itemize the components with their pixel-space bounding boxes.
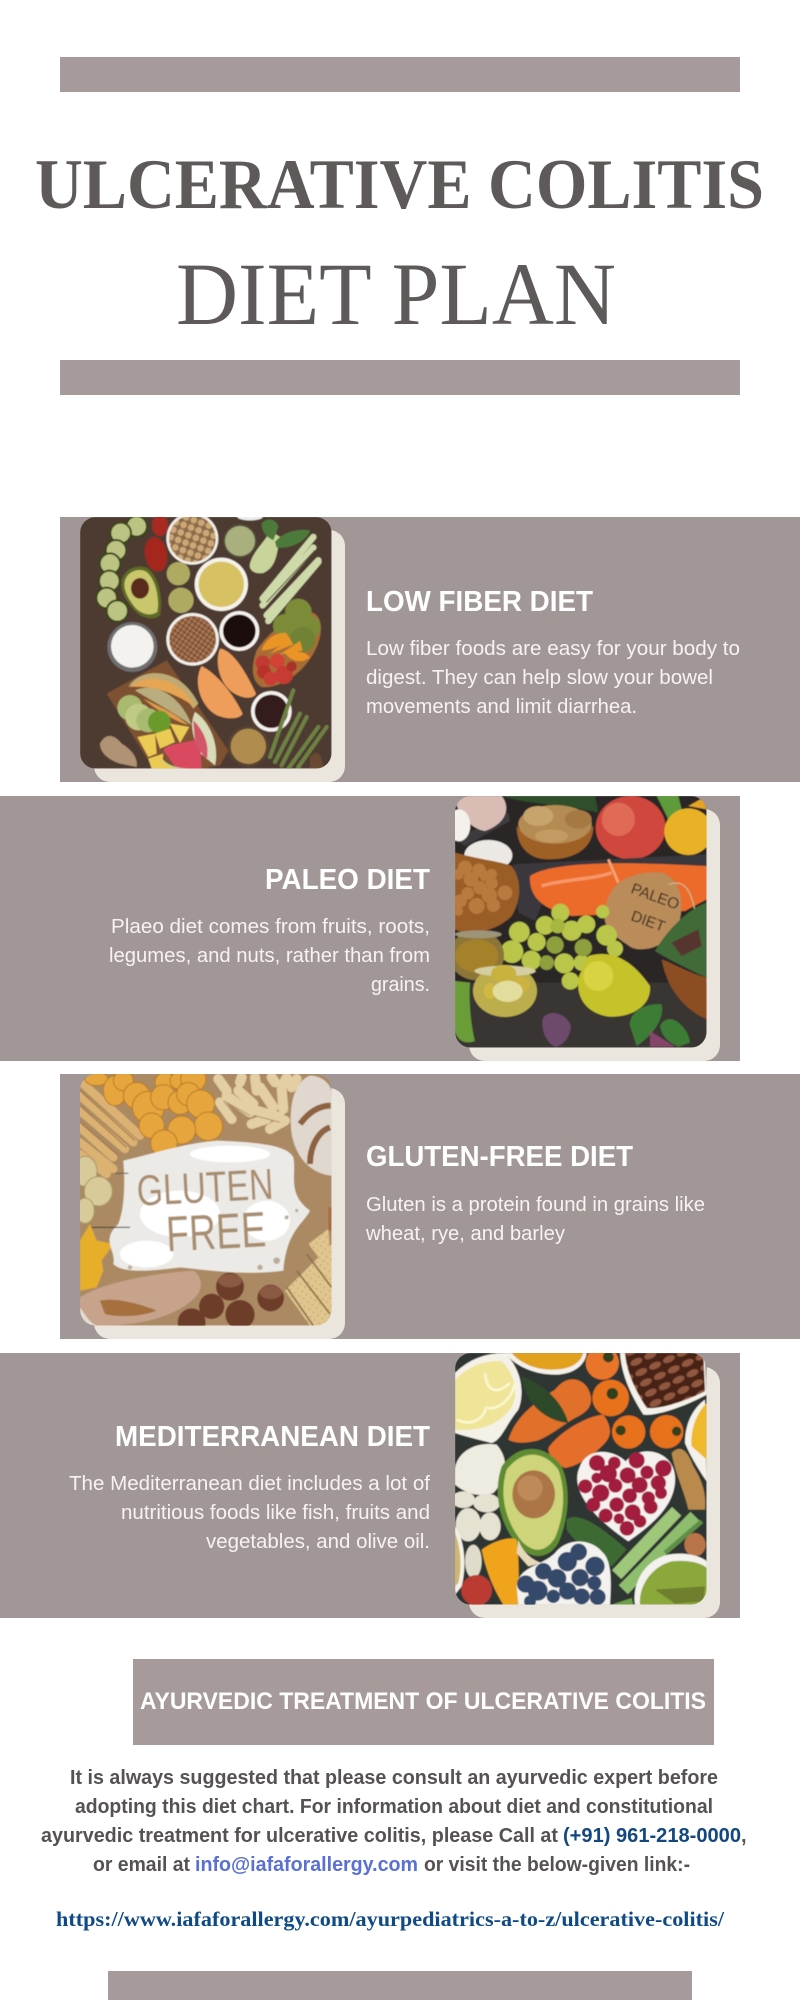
description: digest. They can help slow your bowel xyxy=(366,667,713,689)
description: wheat, rye, and barley xyxy=(365,1223,565,1245)
band xyxy=(60,517,800,782)
description: movements and limit diarrhea. xyxy=(366,696,637,718)
description: Low fiber foods are easy for your body to xyxy=(366,638,740,660)
contact paragraph: adopting this diet chart. For information about diet and constitutional xyxy=(75,1796,713,1818)
description xyxy=(366,638,740,718)
photo: paleo foods: DIET xyxy=(629,908,668,936)
heading: GLUTEN-FREE DIET xyxy=(366,1141,633,1173)
photo backing card xyxy=(469,1367,720,1618)
title line: ulcerative colitis: ULCERATIVE COLITIS xyxy=(35,146,764,224)
heading: MEDITERRANEAN DIET xyxy=(115,1421,430,1453)
lower title bar xyxy=(60,360,740,395)
description: The Mediterranean diet includes a lot of xyxy=(69,1473,430,1495)
top bar xyxy=(60,57,740,92)
band xyxy=(0,1353,740,1618)
contact paragraph: , xyxy=(741,1825,747,1847)
photo: paleo foods xyxy=(448,796,712,1048)
photo: gluten free foods: FREE xyxy=(165,1201,267,1262)
description: Gluten is a protein found in grains like xyxy=(366,1194,705,1216)
banner heading: AYURVEDIC TREATMENT OF ULCERATIVE COLITIS xyxy=(140,1688,706,1715)
title line: diet plan: DIET PLAN xyxy=(176,246,616,344)
description: nutritious foods like fish, fruits and xyxy=(121,1502,430,1524)
photo: paleo foods: PALEO xyxy=(629,880,681,914)
description: vegetables, and olive oil. xyxy=(206,1531,430,1553)
description xyxy=(109,916,430,996)
photo backing card xyxy=(469,809,720,1061)
description xyxy=(365,1194,705,1245)
photo: gluten free foods xyxy=(73,1066,332,1336)
panel: low fiber diet xyxy=(60,513,800,782)
photo backing card xyxy=(94,1088,345,1339)
photo backing card xyxy=(94,530,345,782)
website link: https://www.iafaforallergy.com/ayurpediatrics-a-to-z/ulcerative-colitis/ xyxy=(56,1907,725,1931)
description xyxy=(69,1473,430,1553)
bottom bar xyxy=(108,1971,692,2000)
heading: PALEO DIET xyxy=(265,864,430,896)
panel: paleo diet xyxy=(0,796,740,1061)
photo: gluten free foods: GLUTEN xyxy=(136,1161,275,1216)
email address: info@iafaforallergy.com xyxy=(195,1854,418,1876)
contact paragraph: or email at xyxy=(93,1854,190,1876)
description: Plaeo diet comes from fruits, roots, xyxy=(111,916,430,938)
heading: LOW FIBER DIET xyxy=(366,586,593,618)
banner box xyxy=(133,1659,714,1745)
panel: mediterranean diet xyxy=(0,1346,740,1618)
contact paragraph: It is always suggested that please consult an ayurvedic expert before xyxy=(70,1767,718,1789)
band xyxy=(0,796,740,1061)
phone number: (+91) 961-218-0000 xyxy=(563,1825,741,1847)
section banner: ayurvedic treatment xyxy=(133,1659,714,1745)
panel: gluten-free diet xyxy=(60,1066,800,1339)
contact paragraph xyxy=(41,1767,747,1876)
photo: low fiber foods xyxy=(80,513,332,769)
contact paragraph: or visit the below-given link:- xyxy=(424,1854,690,1876)
description: legumes, and nuts, rather than from xyxy=(109,945,430,967)
contact paragraph: ayurvedic treatment for ulcerative colitis, please Call at xyxy=(41,1825,558,1847)
photo: mediterranean foods xyxy=(452,1346,707,1607)
title xyxy=(35,146,764,344)
description: grains. xyxy=(371,974,430,996)
band xyxy=(60,1074,800,1339)
